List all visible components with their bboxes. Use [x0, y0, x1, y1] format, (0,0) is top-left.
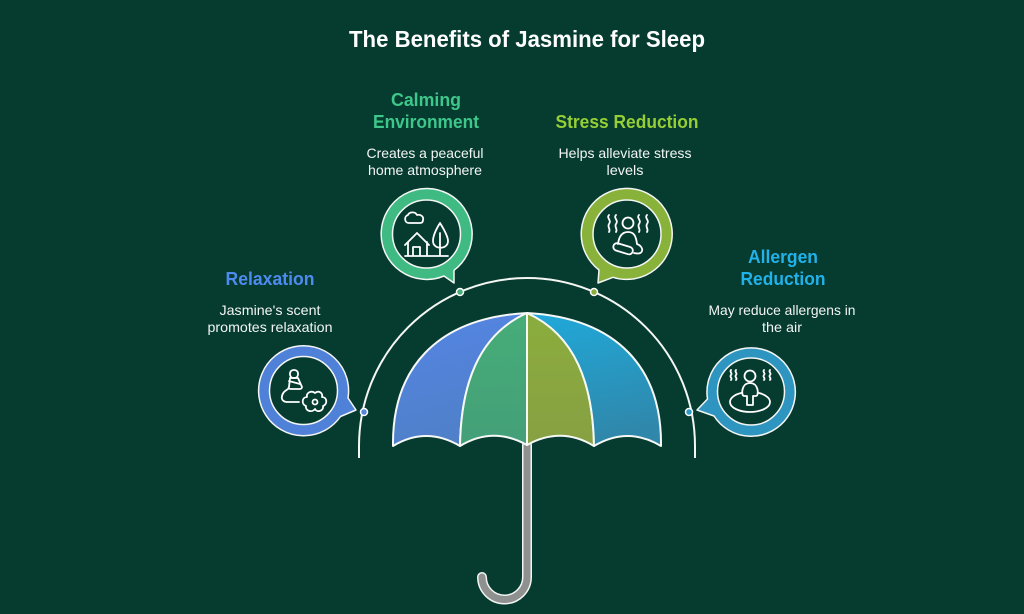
title: The Benefits of Jasmine for Sleep	[349, 26, 705, 52]
icon: meditating person with vapour	[608, 215, 648, 255]
description: Allergen Reduction	[708, 302, 856, 335]
speech bubble: green	[381, 188, 472, 283]
canopy panel: olive	[527, 313, 594, 446]
icon: person in ring with vapour	[730, 370, 771, 412]
heading: Calming Environment: Calming	[391, 90, 461, 110]
outer arc with connector dots	[359, 278, 695, 458]
icon: oil bottle and flower	[282, 370, 326, 411]
description: Stress Reduction: levels	[606, 162, 644, 178]
heading: Allergen Reduction: Allergen	[748, 247, 818, 267]
section: Relaxation	[208, 269, 356, 436]
bubble centre	[718, 358, 784, 425]
umbrella handle	[482, 445, 527, 600]
section: Allergen Reduction	[697, 247, 856, 436]
bubble centre	[392, 200, 460, 268]
description: Relaxation	[208, 302, 332, 335]
description: Calming Environment	[366, 145, 484, 178]
heading: Relaxation: Relaxation	[226, 269, 314, 289]
bubble centre	[593, 200, 661, 268]
description: Stress Reduction	[558, 145, 692, 178]
heading: Allergen Reduction	[740, 247, 826, 289]
umbrella canopy	[393, 313, 661, 446]
description: Allergen Reduction: the air	[762, 319, 802, 335]
description: Calming Environment: Creates a peaceful	[366, 145, 484, 161]
canopy panel: cyan	[527, 313, 661, 446]
icon: house, tree and cloud	[405, 212, 448, 256]
heading: Stress Reduction: Stress Reduction	[556, 112, 698, 132]
speech bubble: cyan	[697, 348, 795, 436]
section: Calming Environment	[366, 90, 484, 283]
speech bubble: blue	[259, 346, 356, 436]
heading: Allergen Reduction: Reduction	[740, 269, 826, 289]
canopy panel: blue	[393, 313, 527, 446]
description: Allergen Reduction: May reduce allergens in	[708, 302, 856, 318]
description: Calming Environment: home atmosphere	[368, 162, 482, 178]
description: Relaxation: promotes relaxation	[208, 319, 332, 335]
canopy panel: green	[460, 313, 527, 446]
description: Stress Reduction: Helps alleviate stress	[558, 145, 692, 161]
bubble centre	[270, 356, 338, 424]
speech bubble: olive	[581, 188, 672, 283]
heading: Calming Environment: Environment	[373, 112, 479, 132]
section: Stress Reduction	[556, 112, 698, 283]
heading: Calming Environment	[373, 90, 479, 132]
description: Relaxation: Jasmine's scent	[220, 302, 321, 318]
